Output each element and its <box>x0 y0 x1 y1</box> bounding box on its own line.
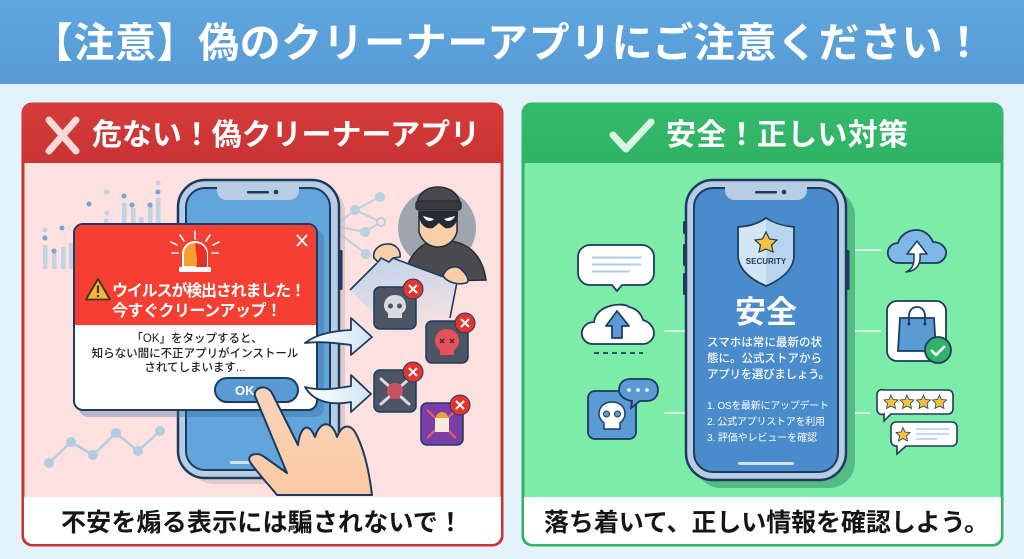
alert body text: 「OK」をタップすると、 <box>131 332 263 345</box>
title: 【注意】偽のクリーナーアプリにご注意ください！ <box>32 20 984 66</box>
phone steps list: 1. OSを最新にアップデート <box>707 399 829 412</box>
phone: danger side <box>178 180 345 484</box>
caption strip: safe <box>524 497 1001 544</box>
sheet outline <box>350 257 457 318</box>
hand tapping OK <box>249 387 372 495</box>
heading: safe: 安全！正しい対策 <box>666 119 908 152</box>
icon: cloud upload <box>582 305 654 353</box>
caption strip: danger: 不安を煽る表示には騙されないで！ <box>61 509 463 537</box>
connector lines <box>664 250 881 413</box>
phone description: アプリを選びましょう。 <box>707 368 830 381</box>
panel: fake cleaner app danger <box>22 103 503 545</box>
thief illustration <box>398 187 486 282</box>
icon: purple lock app <box>421 395 470 445</box>
icon: chat bubble <box>578 245 654 291</box>
alert body text: されてしまいます... <box>144 361 246 374</box>
alert headline: 今すぐクリーンアップ！ <box>112 301 282 320</box>
stolen data sheet <box>350 257 457 345</box>
phone steps list: 3. 評価やレビューを確認 <box>707 431 817 444</box>
arrows from OK button to malicious apps <box>305 318 372 412</box>
icon: security shield: SECURITY <box>746 257 787 266</box>
decorative data chart: bars and dots <box>42 180 160 269</box>
alert popup <box>74 224 324 417</box>
caption strip: danger <box>24 497 501 544</box>
OK button <box>215 378 298 402</box>
icon: cross mark <box>49 120 76 151</box>
phone steps list: 2. 公式アプリストアを利用 <box>707 415 825 428</box>
OK button: OK <box>235 383 255 398</box>
icon: red skull app <box>426 313 475 363</box>
alert headline: ウイルスが検出されました！ <box>112 281 306 300</box>
panel header: safe <box>522 103 1003 163</box>
phone description: スマホは常に最新の状 <box>707 335 822 349</box>
phone: safe side <box>683 180 855 488</box>
icon: four star review <box>877 390 953 421</box>
phone heading: 安全 <box>735 295 797 330</box>
icon: crossbones app <box>374 362 423 412</box>
icon: close <box>297 235 307 246</box>
panel: correct countermeasures <box>522 103 1003 545</box>
icon: one star review <box>891 422 957 454</box>
caption strip: safe: 落ち着いて、正しい情報を確認しよう。 <box>544 509 989 537</box>
decorative network nodes <box>340 192 385 259</box>
icon: warning triangle <box>86 279 110 300</box>
icon: siren <box>171 231 219 272</box>
phone description: 態に。公式ストアから <box>707 351 822 365</box>
alert body text: 知らない間に不正アプリがインストール <box>92 346 299 360</box>
panel header: danger <box>22 103 503 163</box>
icon: check mark <box>613 122 651 149</box>
heading: danger: 危ない！偽クリーナーアプリ <box>92 119 480 152</box>
icon: skull message <box>588 379 658 439</box>
icon: security shield <box>738 218 794 286</box>
thief hands <box>374 244 468 284</box>
decorative line chart <box>44 426 164 468</box>
icon: grey skull app <box>374 279 423 329</box>
icon: cloud with arrow <box>888 230 946 272</box>
icon: shopping bag with check <box>887 301 951 363</box>
header banner <box>0 0 1024 84</box>
